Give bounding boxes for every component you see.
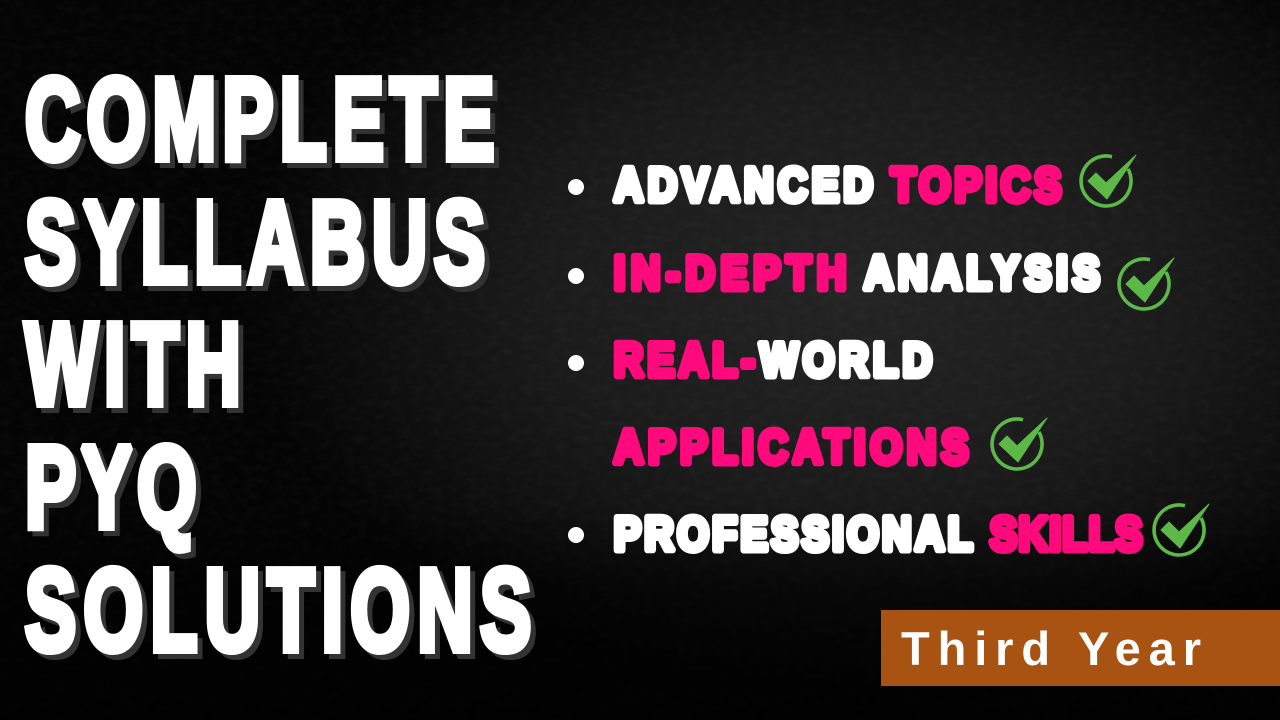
text: WORLD: WORLD [760, 334, 932, 387]
bullet [568, 527, 584, 543]
badge: third year [881, 610, 1280, 686]
title line: SOLUTIONS: SOLUTIONS [25, 545, 531, 675]
text: IN-DEPTH: IN-DEPTH [614, 247, 846, 300]
list item: advanced topics [568, 155, 1136, 212]
list item: in-depth analysis [568, 247, 1174, 309]
text: SKILLS: SKILLS [990, 508, 1142, 561]
list item: professional skills [568, 504, 1209, 561]
text: REAL-: REAL- [614, 334, 755, 387]
bullet [568, 355, 584, 371]
text: APPLICATIONS: APPLICATIONS [614, 421, 968, 474]
icon: green check [1154, 504, 1209, 555]
badge text: Third Year [901, 622, 1201, 675]
bullet [568, 179, 584, 195]
icon: green check [992, 418, 1047, 469]
title line: WITH: WITH [25, 299, 241, 429]
text: ADVANCED: ADVANCED [614, 159, 873, 212]
title: complete syllabus with PYQ solutions [25, 54, 531, 675]
text: TOPICS: TOPICS [891, 159, 1061, 212]
text: PROFESSIONAL: PROFESSIONAL [614, 508, 973, 561]
title line: COMPLETE: COMPLETE [25, 54, 494, 184]
title line: SYLLABUS: SYLLABUS [25, 177, 485, 307]
icon: green check [1119, 258, 1174, 309]
list item: real-world applications [568, 334, 1047, 474]
badge background [881, 610, 1280, 686]
bullet [568, 268, 584, 284]
text: ANALYSIS: ANALYSIS [864, 247, 1100, 300]
title line: PYQ: PYQ [25, 422, 197, 552]
icon: green check [1081, 155, 1136, 206]
